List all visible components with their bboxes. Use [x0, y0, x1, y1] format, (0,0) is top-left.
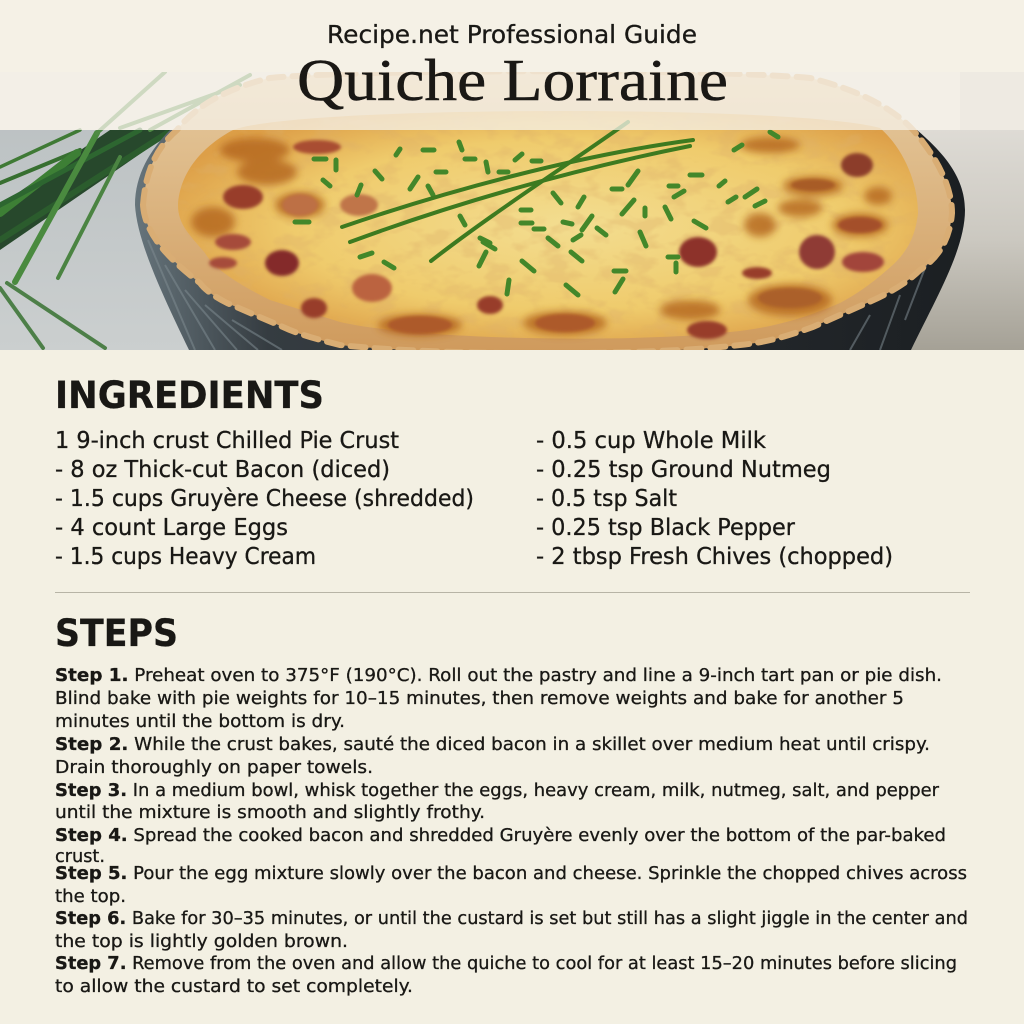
step 7: to allow the custard to set completely. — [55, 976, 413, 997]
tart pan — [135, 130, 965, 352]
panel: ingredients — [55, 374, 893, 570]
ingredients left column — [55, 428, 474, 570]
cloth on right — [911, 130, 1024, 350]
step 5: Step 5. Pour the egg mixture slowly over the bacon and cheese. Sprinkle the chopped chives across — [55, 863, 967, 884]
fallen chives on table — [0, 72, 250, 348]
ingredients left column: - 4 count Large Eggs — [55, 515, 288, 541]
step 7: Step 7. Remove from the oven and allow the quiche to cool for at least 15–20 minutes before slicing — [55, 953, 957, 974]
title: Quiche Lorraine — [297, 47, 728, 113]
chopped chives — [295, 132, 778, 295]
pan flutes — [148, 240, 930, 350]
custard filling — [178, 111, 918, 339]
ingredients right column — [536, 428, 893, 570]
step 3: until the mixture is smooth and slightly frothy. — [55, 802, 485, 823]
step 2: Drain thoroughly on paper towels. — [55, 757, 373, 778]
step 2 — [55, 734, 930, 778]
step 5: the top. — [55, 886, 126, 907]
whole chives garnish — [342, 122, 693, 261]
step 5 — [55, 863, 967, 907]
header subtitle: Recipe.net Professional Guide — [327, 20, 697, 49]
step 4 — [55, 825, 946, 867]
step 1 — [55, 665, 942, 732]
ingredients left column: - 8 oz Thick-cut Bacon (diced) — [55, 457, 390, 483]
step 2: Step 2. While the crust bakes, sauté the diced bacon in a skillet over medium heat until crispy. — [55, 734, 930, 755]
ingredients right column: - 0.25 tsp Black Pepper — [536, 515, 796, 541]
mottled baked texture — [204, 130, 859, 314]
ingredients right column: - 0.5 tsp Salt — [536, 486, 677, 512]
step 4: Step 4. Spread the cooked bacon and shredded Gruyère evenly over the bottom of the par-baked — [55, 825, 946, 846]
step 1: Blind bake with pie weights for 10–15 minutes, then remove weights and bake for another 5 — [55, 688, 904, 709]
step 3 — [55, 780, 940, 823]
heading: steps: STEPS — [55, 612, 178, 655]
step 6: Step 6. Bake for 30–35 minutes, or until the custard is set but still has a slight jiggle in the center and — [55, 908, 968, 929]
step 4: crust. — [55, 846, 105, 867]
step 6 — [55, 908, 968, 952]
step 1: Step 1. Preheat oven to 375°F (190°C). Roll out the pastry and line a 9-inch tart pan or pie dish. — [55, 665, 942, 686]
crust — [143, 71, 952, 353]
browned spots — [191, 137, 892, 336]
step 7 — [55, 953, 957, 997]
step 1: minutes until the bottom is dry. — [55, 711, 345, 732]
hero photo: quiche in tart pan — [0, 71, 1024, 353]
ingredients right column: - 0.25 tsp Ground Nutmeg — [536, 457, 831, 483]
step 3: Step 3. In a medium bowl, whisk together the eggs, heavy cream, milk, nutmeg, salt, and pepper — [55, 780, 940, 801]
ingredients left column: 1 9-inch crust Chilled Pie Crust — [55, 428, 399, 454]
step 6: the top is lightly golden brown. — [55, 931, 348, 952]
ingredients right column: - 0.5 cup Whole Milk — [536, 428, 767, 454]
ingredients right column: - 2 tbsp Fresh Chives (chopped) — [536, 544, 893, 570]
ingredients left column: - 1.5 cups Gruyère Cheese (shredded) — [55, 486, 474, 512]
translucent title band — [0, 72, 1024, 130]
ingredients left column: - 1.5 cups Heavy Cream — [55, 544, 316, 570]
heading: ingredients: INGREDIENTS — [55, 374, 324, 417]
bacon pieces — [209, 140, 884, 339]
panel: steps — [55, 612, 968, 997]
